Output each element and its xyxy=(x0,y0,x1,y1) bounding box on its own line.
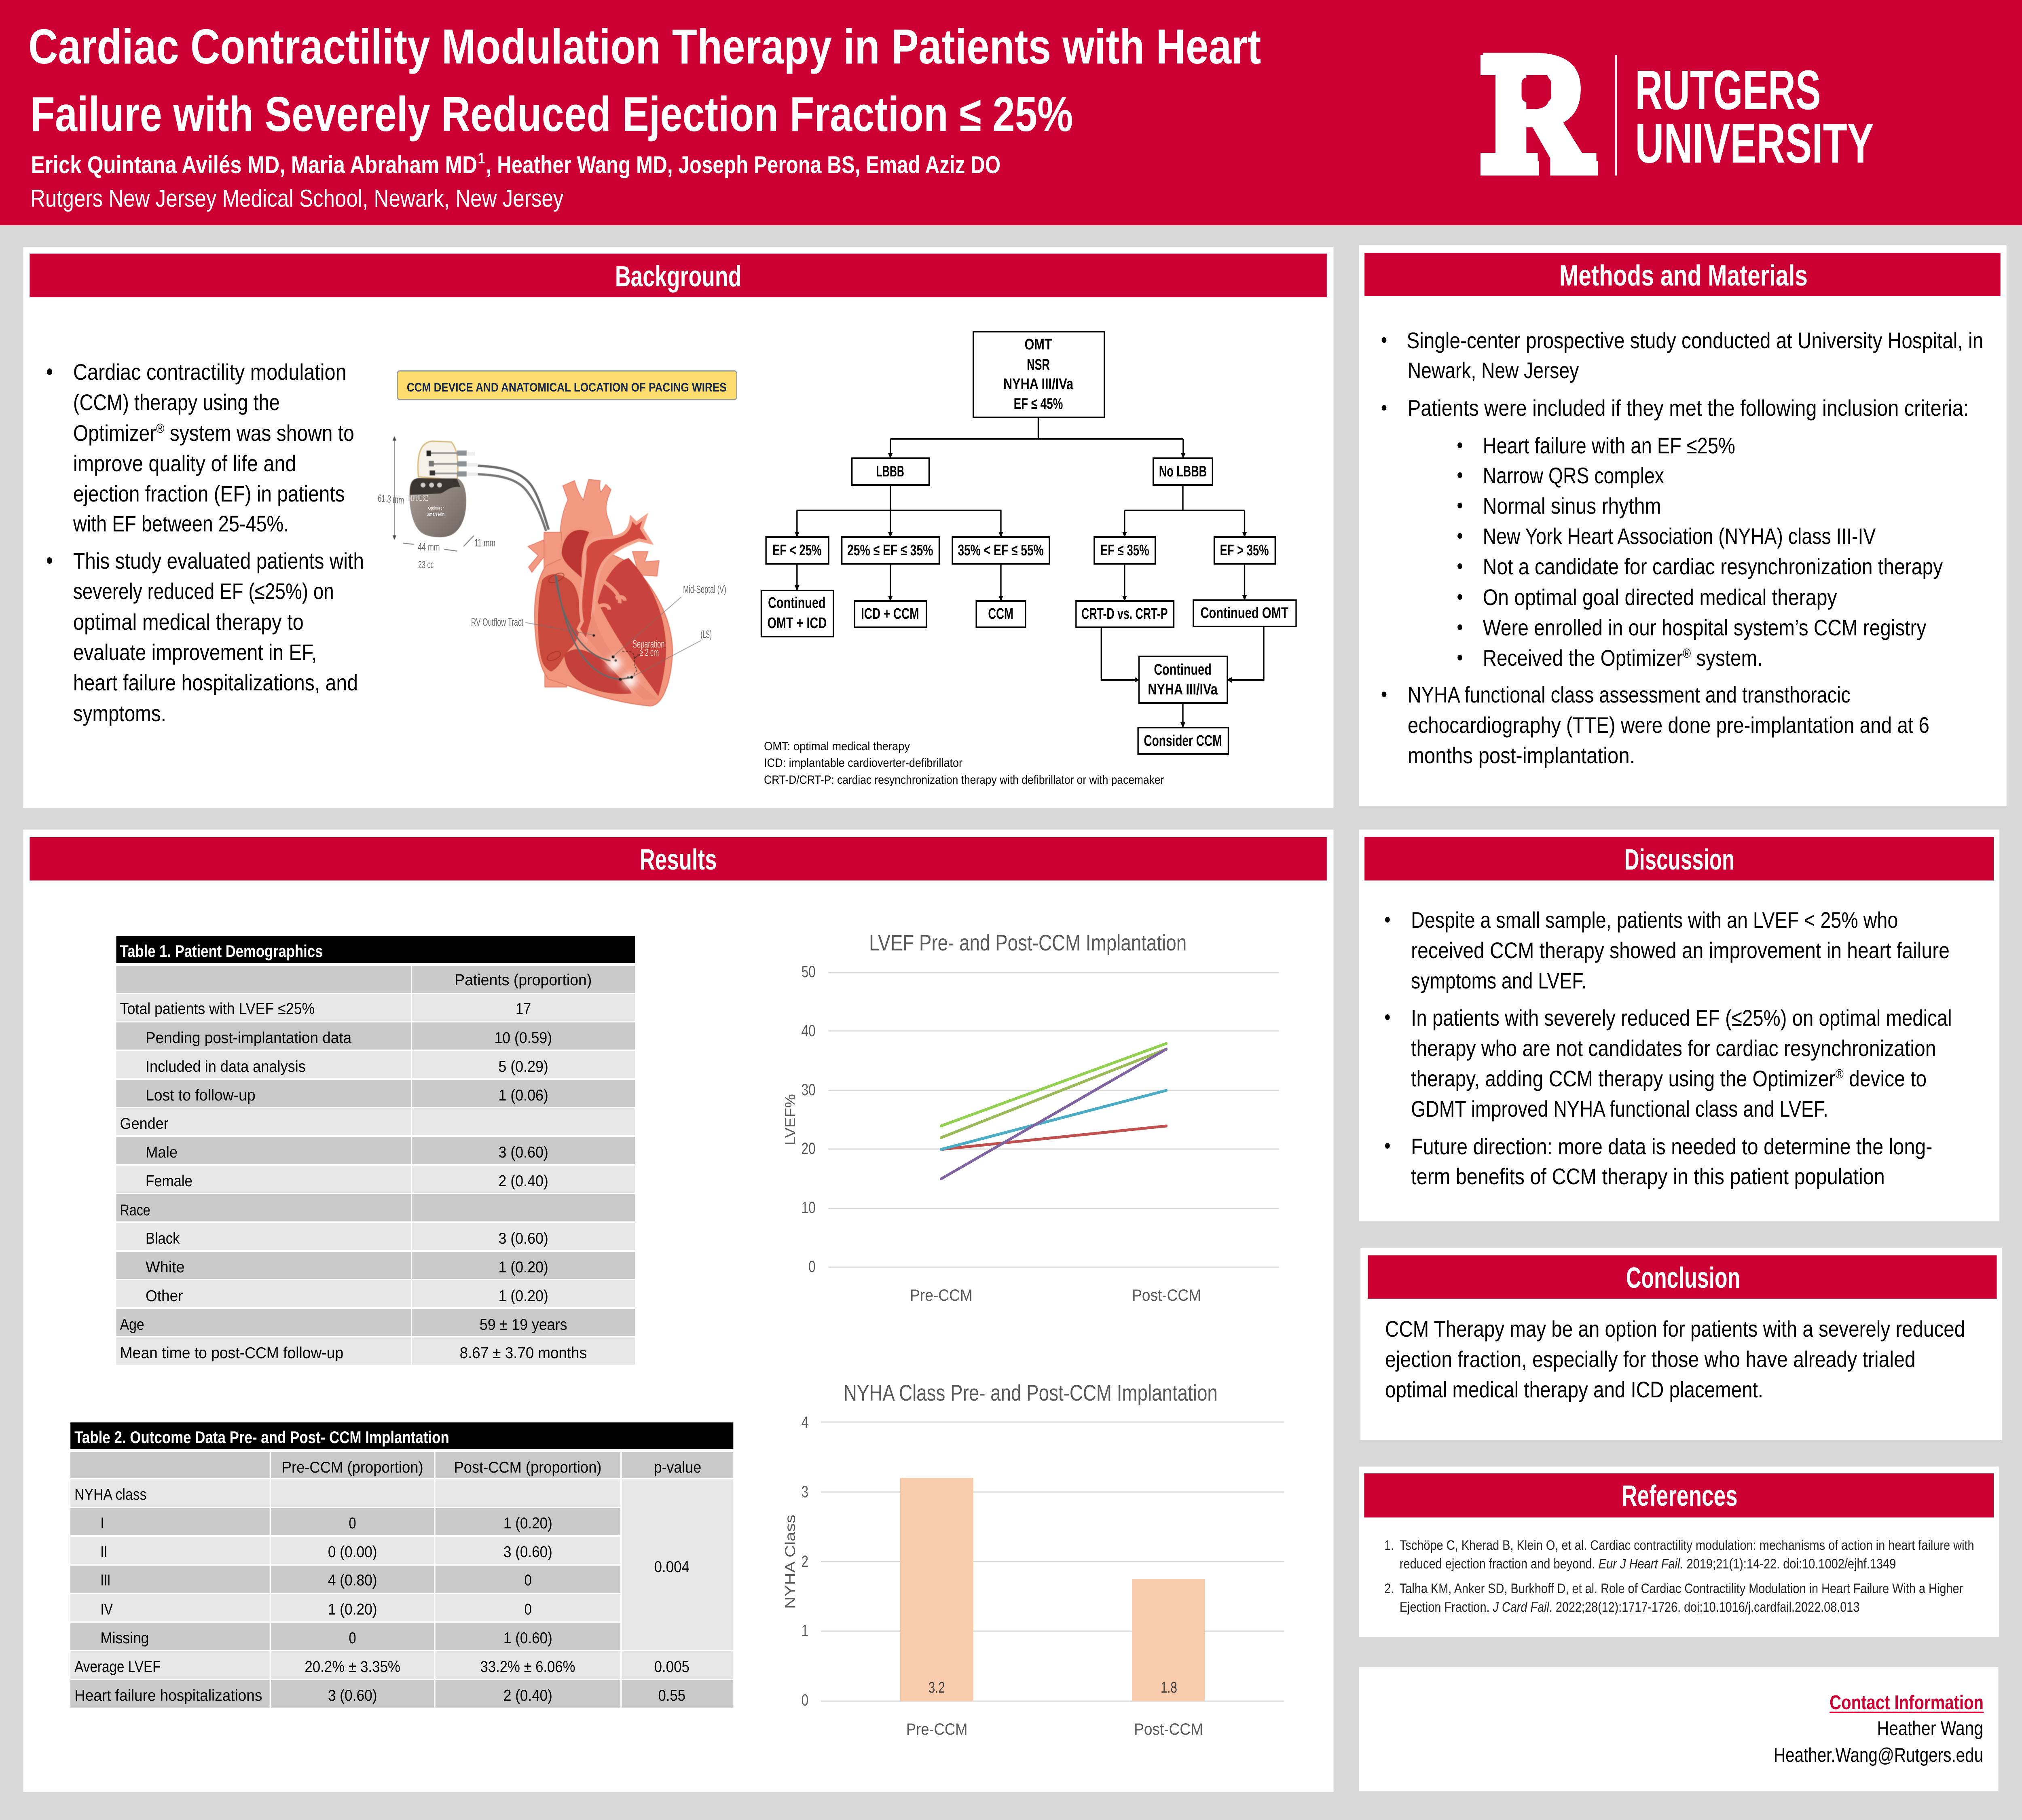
callout: device banner xyxy=(397,371,737,400)
title: Cardiac Contractility Modulation Therapy in Patients with Heart xyxy=(28,19,1261,74)
bar chart: NYHA class pre and post CCM: Pre-CCM xyxy=(906,1720,967,1738)
bar chart: NYHA class pre and post CCM: 0 xyxy=(802,1691,808,1709)
flowchart start box: NSR xyxy=(1027,356,1050,373)
table 2: outcome data: 2 (0.40) xyxy=(503,1687,552,1704)
icon: heart illustration: (LS) xyxy=(700,629,712,641)
table 2: outcome data: 0 xyxy=(349,1514,356,1532)
methods text: ® xyxy=(1683,646,1691,661)
table 1: patient demographics: Male xyxy=(146,1143,178,1161)
panel: contact information xyxy=(1359,1667,1999,1791)
table 2: outcome data: 20.2% ± 3.35% xyxy=(305,1658,400,1676)
discussion text: Future direction: more data is needed to determine the long- xyxy=(1411,1134,1932,1159)
icon: heart illustration xyxy=(471,479,726,706)
table 2: outcome data: 1 (0.60) xyxy=(503,1629,552,1647)
table 2: outcome data: 0 xyxy=(525,1600,532,1618)
flowchart start box: NYHA III/IVa xyxy=(1003,375,1074,393)
methods text: Not a candidate for cardiac resynchronization therapy xyxy=(1483,554,1943,579)
table 1: patient demographics: 5 (0.29) xyxy=(498,1058,548,1075)
bar chart: NYHA class pre and post CCM: 3 xyxy=(802,1483,808,1501)
panel: discussion xyxy=(1359,830,1999,1221)
table 2: outcome data: 1 (0.20) xyxy=(503,1514,552,1532)
flowchart start box: OMT xyxy=(1024,336,1052,353)
reference list: 1. xyxy=(1384,1538,1394,1553)
background text: symptoms. xyxy=(73,700,166,726)
methods text: Received the Optimizer xyxy=(1483,645,1679,671)
icon: heart illustration: Mid-Septal (V) xyxy=(683,584,726,596)
table 1: patient demographics: Pending post-implantation data xyxy=(146,1029,351,1047)
conclusion text: ejection fraction, especially for those who have already trialed xyxy=(1385,1346,1916,1372)
flowchart outcomes: Continued OMT xyxy=(1200,604,1288,622)
table 1: patient demographics: 10 (0.59) xyxy=(495,1029,552,1047)
bar chart: NYHA class pre and post CCM: NYHA Class Pre- and Post-CCM Implantation xyxy=(844,1380,1218,1405)
table 1: patient demographics: 3 (0.60) xyxy=(498,1143,548,1161)
flowchart EF branches xyxy=(766,537,1275,564)
reference list: 2. xyxy=(1384,1581,1394,1596)
background text: This study evaluated patients with xyxy=(73,548,364,574)
flowchart no LBBB xyxy=(1153,458,1212,485)
logo: Rutgers University: R xyxy=(1484,16,1595,209)
background text: Optimizer xyxy=(73,420,154,446)
panel: contact information: Contact Information xyxy=(1830,1691,1984,1714)
discussion text: ® xyxy=(1836,1067,1844,1081)
table 1: patient demographics: Race xyxy=(120,1201,150,1219)
flowchart EF branches: 35% < EF ≤ 55% xyxy=(958,542,1044,559)
discussion text: therapy, adding CCM therapy using the Optimizer xyxy=(1411,1066,1824,1091)
icon: CCM device: Optimizer xyxy=(428,506,444,511)
reference list: Talha KM, Anker SD, Burkhoff D, et al. Role of Cardiac Contractility Modulation in Heart Failure With a Higher xyxy=(1400,1581,1963,1596)
line chart: LVEF pre and post CCM xyxy=(783,930,1279,1304)
title: Failure with Severely Reduced Ejection Fraction ≤ 25% xyxy=(30,86,1073,142)
discussion text: therapy who are not candidates for cardiac resynchronization xyxy=(1411,1035,1936,1061)
flowchart start box: EF ≤ 45% xyxy=(1014,395,1063,413)
table 2: outcome data xyxy=(70,1422,733,1708)
heading: references: References xyxy=(1622,1480,1738,1512)
logo: Rutgers University xyxy=(1481,16,1874,209)
background text: Cardiac contractility modulation xyxy=(73,359,347,385)
table 2: outcome data: Average LVEF xyxy=(74,1658,161,1676)
table 2: outcome data: 33.2% ± 6.06% xyxy=(480,1658,575,1676)
methods text: Heart failure with an EF ≤25% xyxy=(1483,433,1735,458)
icon: CCM device: Smart Mini xyxy=(427,512,446,517)
flowchart no LBBB: No LBBB xyxy=(1159,463,1207,480)
heading: conclusion: Conclusion xyxy=(1626,1262,1740,1294)
background text: system was shown to xyxy=(164,420,354,446)
flowchart outcomes: NYHA III/IVa xyxy=(1148,681,1218,698)
table 2: outcome data: 0.004 xyxy=(654,1558,690,1576)
flowchart outcomes: CCM xyxy=(988,605,1013,622)
methods text: On optimal goal directed medical therapy xyxy=(1483,584,1837,610)
table 2: outcome data: II xyxy=(100,1543,107,1561)
methods text: Normal sinus rhythm xyxy=(1483,493,1661,518)
line chart: LVEF pre and post CCM: LVEF% xyxy=(783,1094,798,1145)
affiliation: Rutgers New Jersey Medical School, Newark, New Jersey xyxy=(30,185,564,212)
bar chart: NYHA class pre and post CCM: NYHA Class xyxy=(783,1515,798,1609)
flowchart outcomes: Consider CCM xyxy=(1144,732,1222,749)
table 2: outcome data: Heart failure hospitalizations xyxy=(74,1687,262,1704)
methods text xyxy=(1382,328,1983,768)
header banner xyxy=(0,0,2022,225)
table 1: patient demographics: Patients (proportion) xyxy=(455,971,592,989)
table 2: outcome data: I xyxy=(100,1514,104,1532)
flowchart start box xyxy=(973,332,1104,417)
table 2: outcome data: Post-CCM (proportion) xyxy=(454,1458,602,1476)
table 2: outcome data: Missing xyxy=(100,1629,149,1647)
background text: optimal medical therapy to xyxy=(73,609,304,635)
discussion text: received CCM therapy showed an improvement in heart failure xyxy=(1411,938,1950,963)
flowchart outcomes: CRT-D vs. CRT-P xyxy=(1081,605,1168,622)
bar chart: NYHA class pre and post CCM xyxy=(783,1380,1284,1738)
flowchart EF branches: EF > 35% xyxy=(1220,542,1269,559)
table 1: patient demographics: 59 ± 19 years xyxy=(480,1316,567,1333)
chart: treatment flowchart xyxy=(761,332,1296,787)
panel: results xyxy=(23,830,1334,1792)
discussion text: Despite a small sample, patients with an LVEF < 25% who xyxy=(1411,907,1898,933)
flowchart outcomes: Continued xyxy=(768,594,826,612)
line chart: LVEF pre and post CCM: LVEF Pre- and Post-CCM Implantation xyxy=(869,930,1187,955)
flowchart abbreviations legend: ICD: implantable cardioverter-defibrillator xyxy=(764,756,962,770)
table 2: outcome data: 4 (0.80) xyxy=(328,1571,377,1589)
authors: , Heather Wang MD, Joseph Perona BS, Emad Aziz DO xyxy=(486,151,1000,178)
heading: background: Background xyxy=(615,260,741,293)
methods text: Were enrolled in our hospital system’s CCM registry xyxy=(1483,615,1927,640)
background text xyxy=(47,359,364,726)
conclusion text: optimal medical therapy and ICD placement. xyxy=(1385,1377,1763,1402)
discussion text: In patients with severely reduced EF (≤25%) on optimal medical xyxy=(1411,1005,1952,1031)
reference list: Tschöpe C, Kherad B, Klein O, et al. Cardiac contractility modulation: mechanisms of action in heart failure with xyxy=(1400,1538,1974,1553)
table 2: outcome data: 3 (0.60) xyxy=(328,1687,377,1704)
table 1: patient demographics: Table 1. Patient Demographics xyxy=(120,942,323,961)
flowchart LBBB: LBBB xyxy=(876,463,904,480)
heading: methods and materials: Methods and Materials xyxy=(1559,260,1808,292)
background text: (CCM) therapy using the xyxy=(73,389,280,415)
panel: conclusion xyxy=(1360,1248,2002,1440)
logo: Rutgers University: UNIVERSITY xyxy=(1635,112,1874,174)
line chart: LVEF pre and post CCM: Post-CCM xyxy=(1132,1286,1201,1304)
table 1: patient demographics: 1 (0.20) xyxy=(498,1258,548,1276)
table 1: patient demographics xyxy=(116,936,635,1365)
heading: results: Results xyxy=(640,844,717,876)
heading: discussion: Discussion xyxy=(1624,844,1734,876)
table 2: outcome data: Pre-CCM (proportion) xyxy=(282,1458,423,1476)
conclusion text xyxy=(1385,1316,1965,1402)
icon: heart illustration: RV Outflow Tract xyxy=(471,616,523,629)
icon: CCM device: 11 mm xyxy=(474,537,495,549)
flowchart outcomes xyxy=(761,590,1296,754)
table 1: patient demographics: Total patients with LVEF ≤25% xyxy=(120,1000,315,1018)
discussion text: GDMT improved NYHA functional class and LVEF. xyxy=(1411,1096,1828,1122)
flowchart EF branches: EF ≤ 35% xyxy=(1100,542,1149,559)
table 1: patient demographics: 1 (0.20) xyxy=(498,1287,548,1305)
methods text: echocardiography (TTE) were done pre-implantation and at 6 xyxy=(1408,712,1929,738)
table 1: patient demographics: 2 (0.40) xyxy=(498,1172,548,1190)
flowchart connectors xyxy=(797,417,1264,728)
callout: device banner: CCM DEVICE AND ANATOMICAL LOCATION OF PACING WIRES xyxy=(407,381,727,395)
icon: CCM device: IMPULSE xyxy=(406,494,428,502)
reference list xyxy=(1384,1538,1974,1615)
table 1: patient demographics: White xyxy=(146,1258,185,1276)
icon: CCM device: 61.3 mm xyxy=(377,493,404,506)
authors xyxy=(31,150,1000,178)
background text: severely reduced EF (≤25%) on xyxy=(73,578,334,604)
table 1: patient demographics: Included in data analysis xyxy=(146,1058,306,1075)
table 2: outcome data: 0.55 xyxy=(658,1687,685,1704)
table 2: outcome data: 0 xyxy=(349,1629,356,1647)
methods text: Newark, New Jersey xyxy=(1408,358,1579,383)
methods text: months post-implantation. xyxy=(1408,743,1635,768)
methods text: Narrow QRS complex xyxy=(1483,463,1664,488)
flowchart outcomes: ICD + CCM xyxy=(861,605,919,622)
icon: heart illustration: Separation xyxy=(632,638,664,650)
icon: CCM device xyxy=(377,437,549,571)
discussion text: device to xyxy=(1844,1066,1927,1091)
flowchart outcomes: Continued xyxy=(1154,661,1212,678)
authors: Erick Quintana Avilés MD, Maria Abraham MD xyxy=(31,151,477,178)
line chart: LVEF pre and post CCM: 40 xyxy=(802,1022,816,1040)
table 1: patient demographics: Black xyxy=(146,1230,180,1247)
bar chart: NYHA class pre and post CCM: 4 xyxy=(802,1413,808,1431)
table 2: outcome data: III xyxy=(100,1571,110,1589)
line chart: LVEF pre and post CCM: 20 xyxy=(802,1139,816,1158)
flowchart outcomes: OMT + ICD xyxy=(768,614,827,632)
authors: 1 xyxy=(478,150,485,167)
table 1: patient demographics: 1 (0.06) xyxy=(498,1086,548,1104)
logo: Rutgers University: RUTGERS xyxy=(1635,59,1821,121)
conclusion text: CCM Therapy may be an option for patients with a severely reduced xyxy=(1385,1316,1965,1342)
line chart: LVEF pre and post CCM: 30 xyxy=(802,1081,816,1099)
bar chart: NYHA class pre and post CCM: 3.2 xyxy=(929,1679,945,1696)
table 2: outcome data: NYHA class xyxy=(74,1486,147,1503)
panel: methods and materials xyxy=(1359,245,2007,806)
table 2: outcome data: 0 xyxy=(525,1571,532,1589)
table 1: patient demographics: Lost to follow-up xyxy=(146,1086,256,1104)
line chart: LVEF pre and post CCM: 0 xyxy=(808,1257,816,1276)
line chart: LVEF pre and post CCM: Pre-CCM xyxy=(910,1286,973,1304)
table 1: patient demographics: Age xyxy=(120,1316,144,1333)
table 2: outcome data: 3 (0.60) xyxy=(503,1543,552,1561)
bar chart: NYHA class pre and post CCM: 1.8 xyxy=(1161,1679,1177,1696)
panel: contact information: Heather.Wang@Rutgers.edu xyxy=(1774,1744,1983,1766)
panel: background xyxy=(23,247,1334,808)
background text: ejection fraction (EF) in patients xyxy=(73,481,345,506)
flowchart abbreviations legend: OMT: optimal medical therapy xyxy=(764,739,910,753)
methods text: Patients were included if they met the following inclusion criteria: xyxy=(1408,395,1969,421)
methods text: New York Heart Association (NYHA) class III-IV xyxy=(1483,523,1876,549)
panel: references xyxy=(1359,1467,1999,1637)
background text: heart failure hospitalizations, and xyxy=(73,670,358,695)
table 1: patient demographics: 17 xyxy=(516,1000,531,1018)
table 2: outcome data: p-value xyxy=(654,1458,701,1476)
reference list: Ejection Fraction. J Card Fail. 2022;28(12):1717-1726. doi:10.1016/j.cardfail.2022.08.013 xyxy=(1400,1600,1859,1615)
flowchart abbreviations legend xyxy=(764,739,1164,787)
table 1: patient demographics: Other xyxy=(146,1287,183,1305)
table 2: outcome data: Table 2. Outcome Data Pre- and Post- CCM Implantation xyxy=(74,1428,449,1447)
line chart: LVEF pre and post CCM: 50 xyxy=(802,963,816,981)
table 2: outcome data: 1 (0.20) xyxy=(328,1600,377,1618)
title xyxy=(28,19,1261,142)
discussion text xyxy=(1385,907,1952,1189)
table 2: outcome data: IV xyxy=(100,1600,113,1618)
methods text: Single-center prospective study conducted at University Hospital, in xyxy=(1407,328,1983,353)
discussion text: term benefits of CCM therapy in this patient population xyxy=(1411,1164,1885,1189)
background text: ® xyxy=(156,421,165,436)
table 1: patient demographics: Female xyxy=(146,1172,192,1190)
panel: contact information: Heather Wang xyxy=(1877,1717,1983,1740)
bar chart: NYHA class pre and post CCM: Post-CCM xyxy=(1134,1720,1203,1738)
methods text: system. xyxy=(1691,645,1762,671)
methods text: NYHA functional class assessment and transthoracic xyxy=(1408,682,1851,707)
icon: CCM device: 23 cc xyxy=(418,559,434,571)
background text: improve quality of life and xyxy=(73,451,296,476)
flowchart LBBB xyxy=(852,458,929,485)
icon: heart illustration: ≥ 2 cm xyxy=(640,647,659,659)
flowchart EF branches: EF < 25% xyxy=(772,542,822,559)
line chart: LVEF pre and post CCM: 10 xyxy=(802,1198,816,1217)
flowchart abbreviations legend: CRT-D/CRT-P: cardiac resynchronization therapy with defibrillator or with pacemaker xyxy=(764,773,1164,787)
bar chart: NYHA class pre and post CCM: 1 xyxy=(802,1621,808,1640)
icon: CCM device: 44 mm xyxy=(418,541,440,553)
background text: with EF between 25-45%. xyxy=(73,511,289,536)
flowchart EF branches: 25% ≤ EF ≤ 35% xyxy=(847,542,933,559)
bar chart: NYHA class pre and post CCM: 2 xyxy=(802,1552,808,1570)
table 1: patient demographics: 3 (0.60) xyxy=(498,1230,548,1247)
table 2: outcome data: 0 (0.00) xyxy=(328,1543,377,1561)
table 1: patient demographics: Mean time to post-CCM follow-up xyxy=(120,1344,343,1362)
discussion text: symptoms and LVEF. xyxy=(1411,968,1586,993)
table 2: outcome data: 0.005 xyxy=(654,1658,690,1676)
background text: evaluate improvement in EF, xyxy=(73,639,317,665)
table 1: patient demographics: Gender xyxy=(120,1115,169,1132)
reference list: reduced ejection fraction and beyond. Eur J Heart Fail. 2019;21(1):14-22. doi:10.1002/ejhf.1349 xyxy=(1400,1556,1896,1572)
table 1: patient demographics: 8.67 ± 3.70 months xyxy=(460,1344,587,1362)
